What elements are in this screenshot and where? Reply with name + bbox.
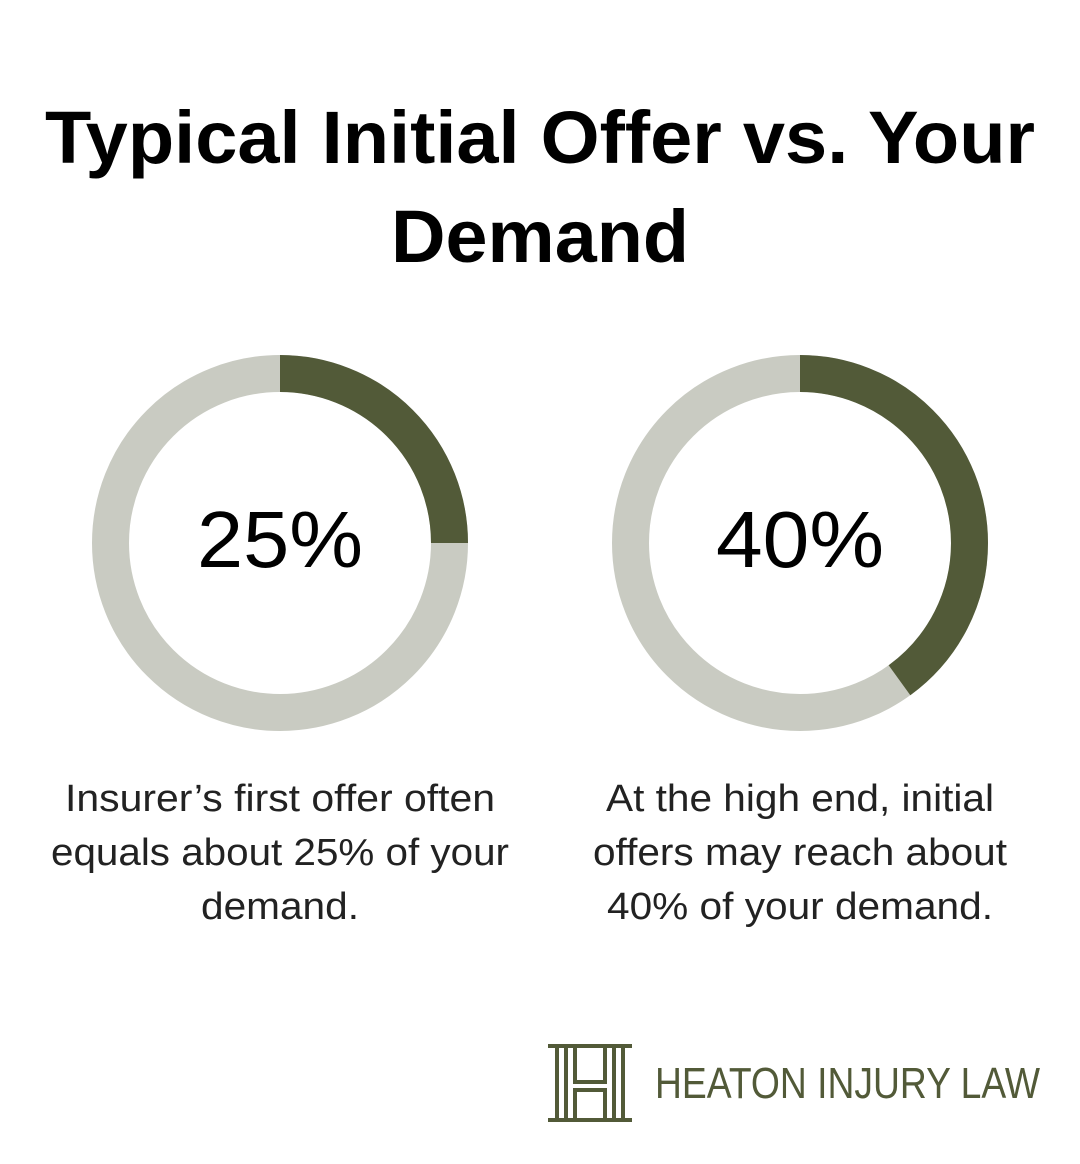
title: Typical Initial Offer vs. Your (45, 96, 1035, 179)
text: left caption: equals about 25% of your (51, 832, 509, 874)
panel: 40% donut (630, 374, 970, 712)
title (45, 96, 1035, 278)
text: left caption: demand. (201, 886, 359, 928)
panel: 25% donut (110, 374, 450, 712)
logo (548, 1044, 1040, 1122)
title: Demand (391, 195, 689, 278)
text: right caption (593, 778, 1007, 928)
text: left caption (51, 778, 509, 928)
text: right caption: 40% of your demand. (607, 886, 993, 928)
panel: 25% donut: 25% (197, 495, 363, 584)
text: left caption: Insurer’s first offer often (65, 778, 495, 820)
icon: H monogram (548, 1044, 632, 1122)
text: right caption: offers may reach about (593, 832, 1007, 874)
text: right caption: At the high end, initial (606, 778, 994, 820)
panel: 40% donut: 40% (716, 495, 884, 584)
